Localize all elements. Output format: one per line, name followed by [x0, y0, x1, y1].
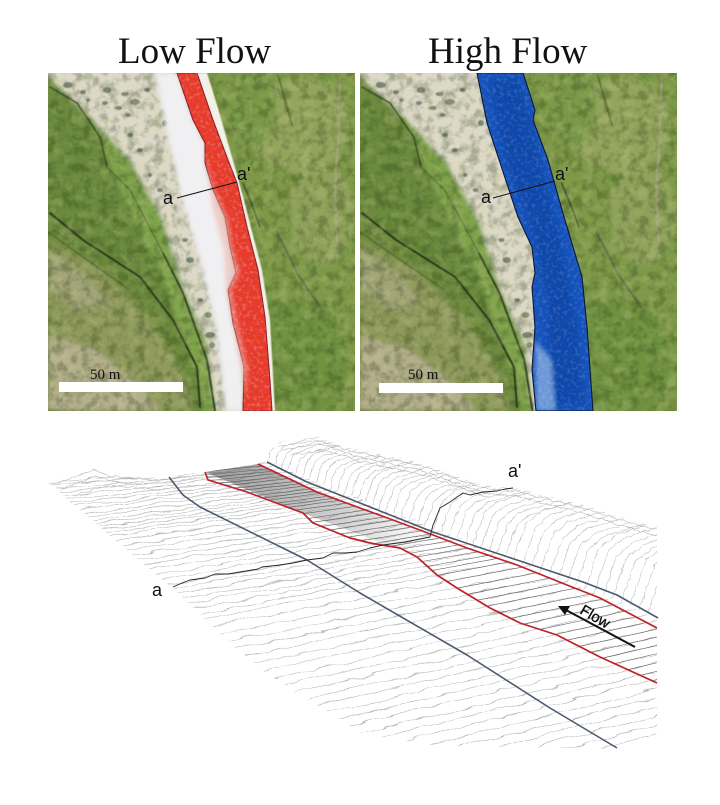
water hatching between low-flow edges	[206, 464, 657, 681]
label a: a	[152, 580, 163, 600]
panel: high flow aerial map	[360, 73, 677, 411]
cross-section profile a to a'	[173, 488, 513, 587]
low flow water: red	[176, 73, 272, 411]
near high-flow edge (slate)	[169, 477, 617, 748]
panel: low flow aerial map	[48, 73, 355, 411]
cross-section line a to a'	[177, 182, 237, 198]
label a: a	[481, 187, 492, 207]
flow label: Flow	[577, 602, 613, 632]
cross-section line a to a'	[493, 181, 555, 198]
scale label: 50 m	[408, 367, 439, 383]
label a: a	[163, 188, 174, 208]
label a': a'	[237, 164, 250, 184]
figure: low and high flow aerial maps with 3D terrain mesh	[48, 37, 677, 749]
label a': a'	[508, 461, 521, 481]
title: High Flow: High Flow	[428, 31, 588, 72]
scale bar	[379, 383, 503, 393]
far bank profile lines	[266, 437, 657, 612]
label a': a'	[555, 164, 568, 184]
terrain scan lines	[48, 437, 657, 749]
white bank strip	[197, 73, 275, 411]
exposed white gravel bar	[155, 73, 244, 411]
far high-flow edge (slate)	[267, 462, 658, 618]
high flow water: blue	[470, 73, 600, 411]
far low-flow edge (red)	[258, 464, 657, 628]
scale bar	[59, 382, 183, 392]
title: Low Flow: Low Flow	[118, 31, 271, 72]
near low-flow edge (red)	[205, 472, 657, 683]
scale label: 50 m	[90, 367, 121, 383]
ridge and back-edge mottling	[50, 440, 657, 536]
flow arrow	[558, 606, 635, 647]
panel: 3D terrain mesh	[48, 437, 658, 749]
